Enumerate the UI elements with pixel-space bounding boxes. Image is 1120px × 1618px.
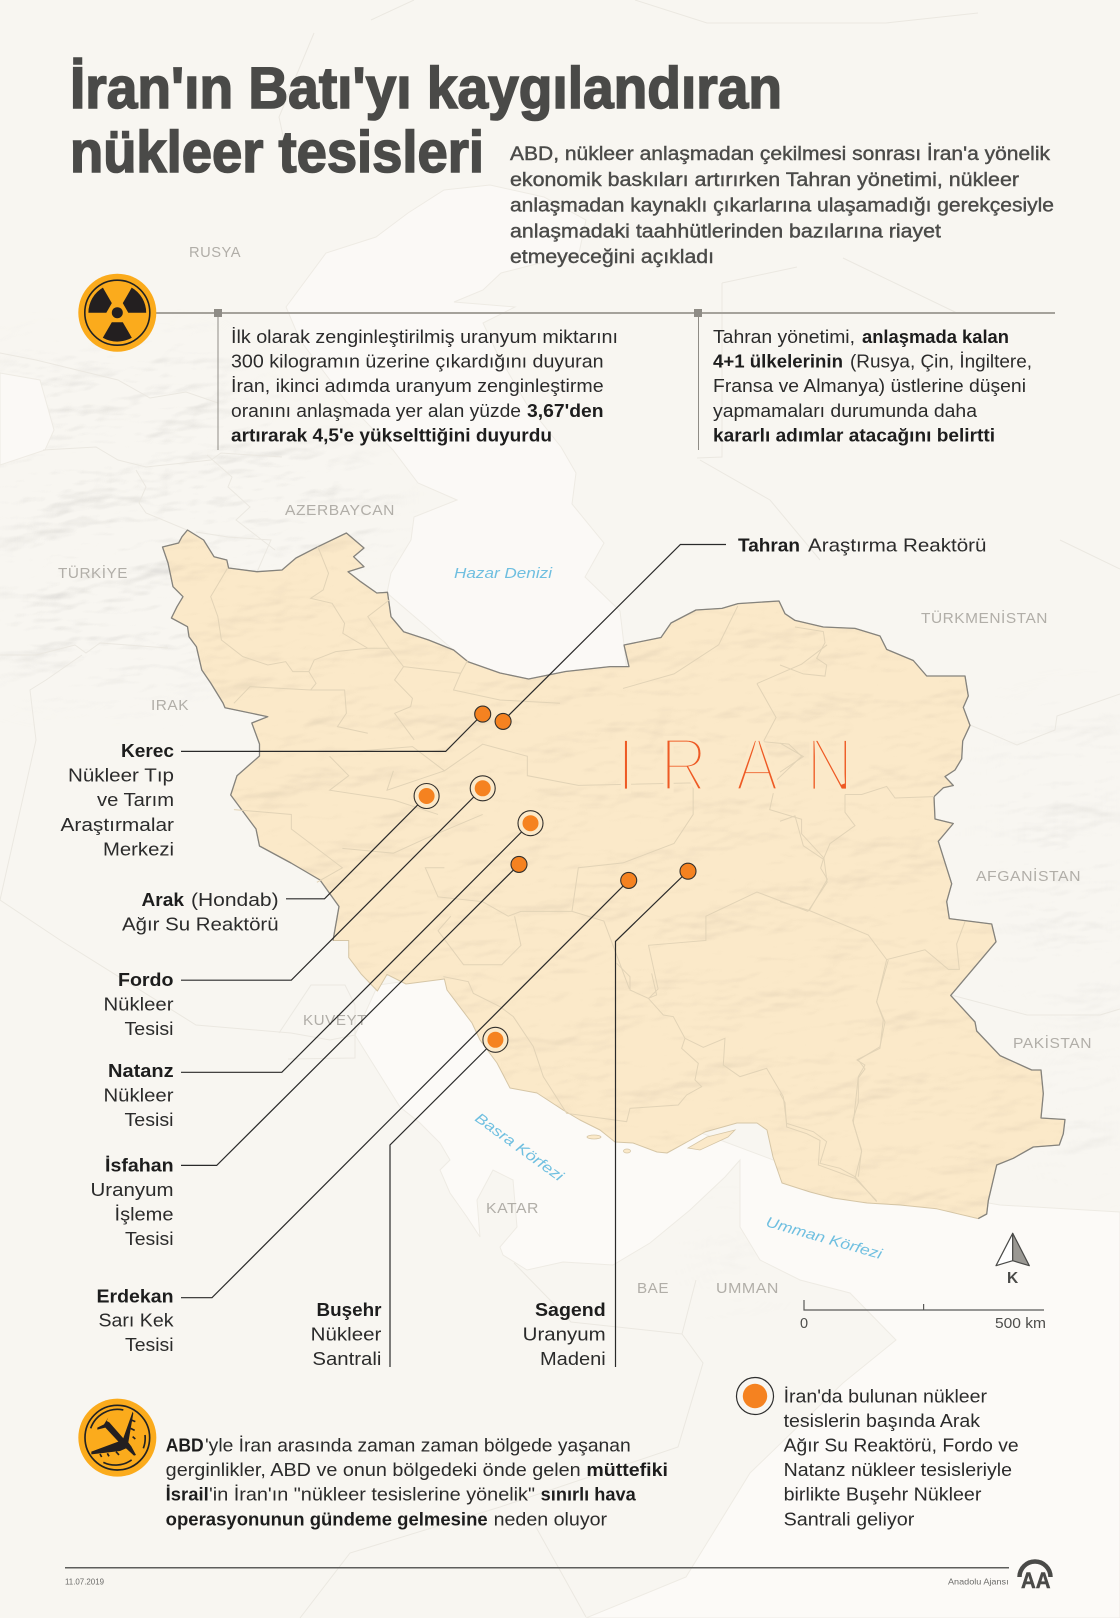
text block: tensions (166, 1436, 668, 1529)
label: Sagend (523, 1300, 606, 1369)
label: Isfahan: Tesisi (125, 1229, 174, 1249)
label: Kerec: Kerec (121, 741, 174, 761)
label: IRAN: IRAN (617, 723, 853, 808)
label: Fordo: Tesisi (124, 1019, 174, 1039)
text block: tensions: 'yle İran arasında zaman zaman bölgede yaşanan (205, 1436, 631, 1456)
label: Busehr: Buşehr (316, 1300, 382, 1320)
intro text: etmeyeceğini açıkladı (510, 246, 714, 268)
text block: tensions: gerginlikler, ABD ve onun bölgedeki önde gelen (166, 1460, 581, 1480)
country labels: RUSYA (189, 245, 241, 261)
label: Erdekan: Erdekan (96, 1287, 174, 1307)
label: Sagend: Sagend (535, 1300, 606, 1320)
label: Natanz: Tesisi (124, 1110, 174, 1130)
scale bar (800, 1300, 1046, 1332)
label: Erdekan (96, 1287, 175, 1355)
country labels: TÜRKİYE (58, 564, 128, 582)
label: Fordo: Fordo (118, 970, 174, 990)
label: Erdekan: Tesisi (125, 1335, 174, 1355)
text block: tensions: neden oluyor (494, 1509, 607, 1529)
intro text: ABD, nükleer anlaşmadan çekilmesi sonrası İran'a yönelik (510, 142, 1050, 165)
text block: enrichment: 300 kilogramın üzerine çıkardığını duyuran (231, 352, 604, 372)
map: Iran (162, 529, 1066, 1220)
text block: Tehran (713, 327, 1032, 446)
text block: tensions: 'in İran'ın "nükleer tesislerine yönelik" (209, 1485, 535, 1505)
label: Arak: (Hondab) (191, 890, 279, 910)
country labels (58, 245, 1092, 1297)
label: Isfahan: İşleme (114, 1205, 174, 1225)
scale bar: 0 (800, 1316, 808, 1332)
country labels: KUVEYT (303, 1013, 367, 1029)
label: Busehr: Santrali (312, 1349, 381, 1369)
sea labels: Umman Körfezi (764, 1214, 885, 1263)
text block: enrichment: oranını anlaşmada yer alan yüzde (231, 401, 521, 421)
icon: north arrow: K (1007, 1270, 1019, 1287)
country labels: TÜRKMENİSTAN (921, 609, 1048, 627)
label: Busehr (311, 1300, 382, 1369)
footer (65, 1567, 1009, 1586)
label: Fordo: Nükleer (104, 994, 174, 1014)
label: Isfahan (90, 1156, 174, 1249)
label: Natanz: Nükleer (104, 1086, 174, 1106)
label: Tahran (738, 536, 986, 556)
timeline rule (155, 309, 1055, 450)
legend: Santrali geliyor (784, 1509, 914, 1529)
text block: enrichment: İran, ikinci adımda uranyum zenginleştirme (231, 376, 604, 396)
icon: radiation (78, 274, 156, 352)
label: Isfahan: İsfahan (105, 1156, 174, 1176)
label: Arak (122, 890, 279, 934)
sea labels: Hazar Denizi (454, 566, 553, 582)
label: Natanz: Natanz (108, 1061, 174, 1081)
text block: Tehran: yapmamaları durumunda daha (713, 401, 978, 421)
text block: tensions: İsrail (166, 1485, 209, 1505)
sea labels: Basra Körfezi (472, 1110, 567, 1185)
country labels: UMMAN (716, 1281, 779, 1297)
text block: Tehran: Fransa ve Almanya) üstlerine düşeni (713, 376, 1026, 396)
label: Arak: Arak (142, 890, 185, 910)
legend (736, 1378, 1019, 1529)
legend: Natanz nükleer tesisleriyle (784, 1460, 1012, 1480)
text block: enrichment: artırarak 4,5'e yükselttiğini duyurdu (231, 426, 552, 446)
country labels: PAKİSTAN (1013, 1034, 1092, 1052)
text block: tensions: ABD (166, 1436, 204, 1456)
text block: tensions: operasyonunun gündeme gelmesine (166, 1509, 488, 1529)
title: İran'ın Batı'yı kaygılandıran (70, 56, 782, 121)
legend: İran'da bulunan nükleer (784, 1387, 987, 1407)
label: Kerec (60, 741, 174, 860)
label: Kerec: Araştırmalar (60, 815, 174, 835)
text block: enrichment (231, 327, 618, 446)
legend: Ağır Su Reaktörü, Fordo ve (784, 1436, 1019, 1456)
label: Fordo (104, 970, 174, 1039)
text block: Tehran: anlaşmada kalan (862, 327, 1009, 347)
label: Erdekan: Sarı Kek (98, 1311, 175, 1331)
text block: enrichment: 3,67'den (527, 401, 604, 421)
label: Kerec: ve Tarım (97, 790, 174, 810)
country labels: IRAK (151, 698, 189, 714)
text block: Tehran: 4+1 ülkelerinin (713, 352, 843, 372)
label: Kerec: Merkezi (103, 840, 174, 860)
logo: AA: AA (1021, 1568, 1051, 1593)
label: Sagend: Madeni (540, 1349, 606, 1369)
label: Isfahan: Uranyum (90, 1180, 174, 1200)
text block: Tehran: Tahran yönetimi, (713, 327, 855, 347)
legend: tesislerin başında Arak (784, 1411, 981, 1431)
label: Kerec: Nükleer Tıp (68, 766, 174, 786)
leader lines (181, 544, 726, 1367)
icon: warplane (78, 1399, 156, 1477)
icon: north arrow (996, 1233, 1029, 1287)
text block: Tehran: (Rusya, Çin, İngiltere, (850, 352, 1032, 372)
country labels: AZERBAYCAN (285, 503, 395, 519)
legend: birlikte Buşehr Nükleer (784, 1485, 981, 1505)
scale bar: 500 km (995, 1316, 1046, 1332)
label: Natanz (104, 1061, 174, 1130)
text block: tensions: müttefiki (586, 1460, 668, 1480)
country labels: KATAR (486, 1201, 539, 1217)
title (70, 56, 782, 185)
footer: Anadolu Ajansı (948, 1576, 1009, 1586)
intro text (510, 142, 1054, 268)
label: Tahran: Araştırma Reaktörü (808, 536, 986, 556)
sea labels (454, 566, 885, 1263)
country labels: BAE (637, 1281, 669, 1297)
label: Busehr: Nükleer (311, 1325, 381, 1345)
title: nükleer tesisleri (70, 120, 484, 185)
facility markers (414, 706, 696, 1052)
intro text: anlaşmadan kaynaklı çıkarlarına ulaşamadığı gerekçesiyle (510, 194, 1054, 216)
label: Arak: Ağır Su Reaktörü (122, 914, 279, 934)
country labels: AFGANİSTAN (976, 867, 1081, 885)
text block: tensions: sınırlı hava (541, 1485, 637, 1505)
intro text: anlaşmadaki taahhütlerinden bazılarına riayet (510, 220, 942, 242)
intro text: ekonomik baskıları artırırken Tahran yönetimi, nükleer (510, 169, 1020, 191)
label: Tahran: Tahran (738, 536, 800, 556)
text block: enrichment: İlk olarak zenginleştirilmiş uranyum miktarını (231, 327, 618, 347)
text block: Tehran: kararlı adımlar atacağını belirtti (713, 426, 995, 446)
footer: 11.07.2019 (65, 1576, 104, 1586)
label: Sagend: Uranyum (523, 1325, 606, 1345)
